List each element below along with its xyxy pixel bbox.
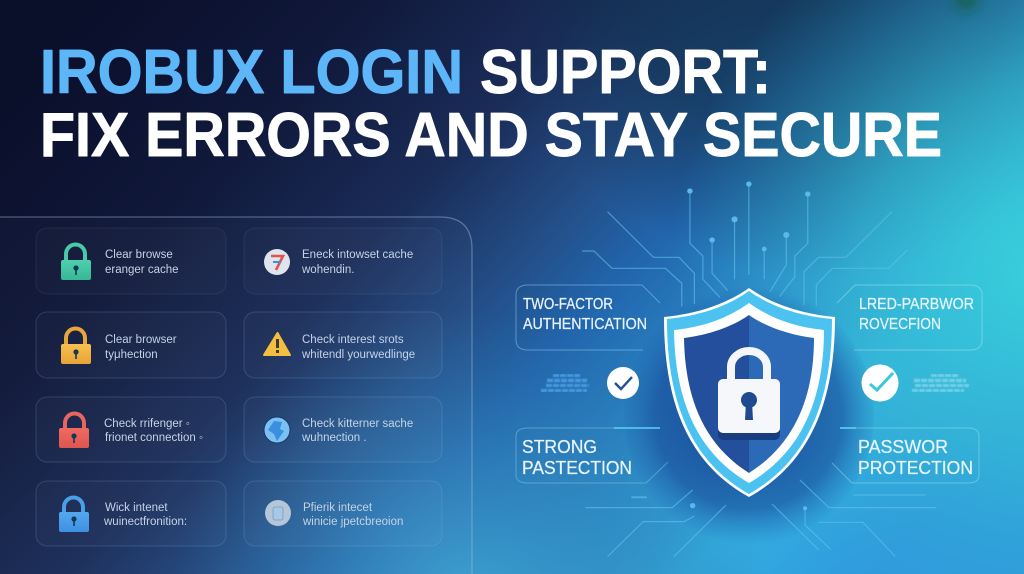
card: pilerik intecet bbox=[244, 481, 442, 546]
panel: troubleshooting list bbox=[0, 217, 472, 574]
icon: round seven badge bbox=[264, 249, 290, 275]
card text: Wick intenet bbox=[105, 502, 168, 514]
title line 2: FIX ERRORS AND STAY SECURE bbox=[40, 101, 942, 170]
card text: Check interest srots bbox=[302, 334, 404, 346]
label: passwor protection bbox=[832, 428, 979, 483]
card text: Eneck intowset cache bbox=[302, 249, 413, 261]
icon: blue globe bbox=[264, 417, 290, 443]
padlock bbox=[718, 351, 780, 440]
card: clear browser cache bbox=[36, 228, 226, 294]
shield cyan band bbox=[667, 291, 832, 494]
card text bbox=[301, 334, 415, 361]
shield blue face bbox=[684, 315, 814, 473]
card text: Pfierik intecet bbox=[303, 502, 373, 514]
card: check friend bbox=[36, 397, 226, 462]
card: wick internet bbox=[36, 481, 226, 546]
title bbox=[40, 38, 942, 170]
card text: whitendl yourwedlinge bbox=[301, 349, 415, 361]
circuit nodes bbox=[687, 181, 811, 510]
decoration: right brick pattern bbox=[912, 376, 969, 390]
shield outer white rim bbox=[664, 288, 835, 497]
shield bbox=[664, 288, 835, 497]
card: check cache bbox=[244, 228, 442, 294]
label: lred-parbwor rovecfion bbox=[837, 285, 982, 350]
card text: tyμhection bbox=[105, 349, 158, 361]
card text: wohendin. bbox=[301, 264, 354, 276]
circuit lines bbox=[582, 181, 936, 557]
card text bbox=[301, 418, 413, 444]
card text: Clear browser bbox=[105, 334, 177, 346]
label: passwor protection: PROTECTION bbox=[858, 457, 973, 478]
title line 1 highlighted: IROBUX LOGIN bbox=[40, 38, 463, 107]
label: passwor protection: PASSWOR bbox=[858, 436, 948, 457]
icon: red padlock bbox=[59, 414, 89, 448]
icon: yellow padlock bbox=[61, 328, 91, 364]
card text bbox=[105, 249, 179, 276]
label: strong pastection bbox=[516, 428, 668, 483]
icon: warning triangle bbox=[264, 333, 290, 355]
shield inner white band bbox=[674, 303, 824, 483]
icon: green padlock bbox=[61, 245, 91, 280]
icon: blue padlock bbox=[59, 498, 89, 532]
card text bbox=[104, 418, 203, 444]
card text: Check rrifenger ◦ bbox=[104, 418, 190, 430]
card text: winicie jpetcbreoion bbox=[302, 516, 403, 528]
card text bbox=[301, 249, 413, 276]
halo behind shield bbox=[624, 285, 874, 545]
card text bbox=[105, 334, 177, 361]
card text bbox=[103, 502, 187, 528]
decoration: left brick pattern bbox=[541, 376, 589, 390]
icon: left check badge bbox=[607, 367, 639, 399]
label: two-factor authentication bbox=[516, 285, 660, 350]
label: lred-parbwor rovecfion: LRED-PARBWOR bbox=[859, 296, 974, 313]
icon: right check badge bbox=[862, 364, 898, 402]
label: strong pastection: STRONG bbox=[522, 436, 597, 457]
title line 1 white: SUPPORT: bbox=[480, 38, 771, 107]
card: check internet bbox=[244, 397, 442, 462]
card text bbox=[302, 502, 403, 528]
card text: wuhnection . bbox=[301, 432, 367, 444]
card: check interest bbox=[244, 312, 442, 378]
icon: grey device badge bbox=[265, 500, 291, 526]
label: two-factor authentication: TWO-FACTOR bbox=[523, 296, 613, 313]
label: strong pastection: PASTECTION bbox=[522, 457, 632, 478]
card text: eranger cache bbox=[105, 264, 179, 276]
label: two-factor authentication: AUTHENTICATION bbox=[523, 316, 647, 333]
label: lred-parbwor rovecfion: ROVECFION bbox=[859, 316, 941, 333]
card: clear browser bbox=[36, 312, 226, 378]
card text: wuinectfronition: bbox=[103, 516, 187, 528]
card text: Clear browse bbox=[105, 249, 173, 261]
card text: Check kitterner sache bbox=[302, 418, 413, 430]
card text: frionet connection ◦ bbox=[105, 432, 203, 444]
